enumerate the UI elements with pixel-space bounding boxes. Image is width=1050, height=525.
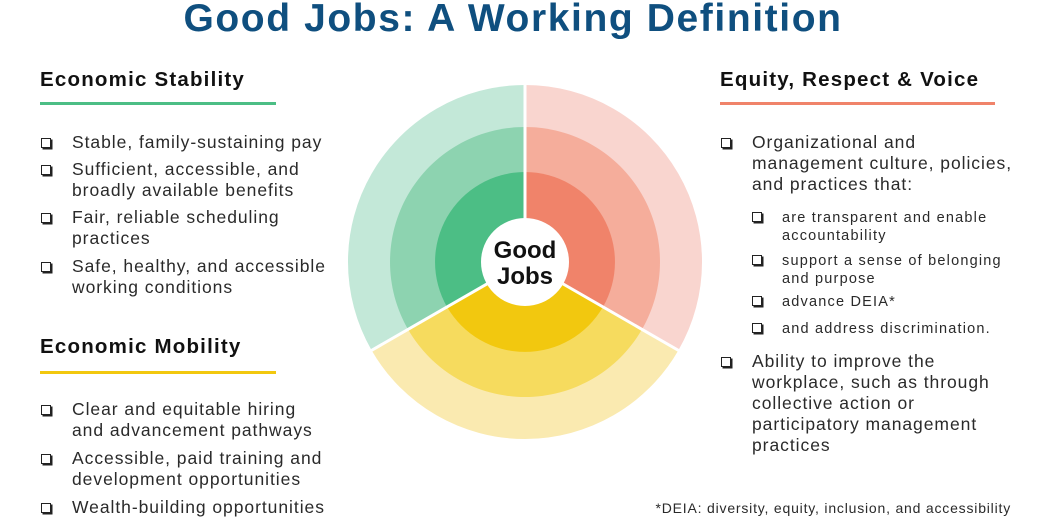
list: equity items: management culture, policies, <box>752 153 1012 173</box>
center label: Jobs <box>497 263 553 290</box>
list: stability items: practices <box>72 228 151 248</box>
list: equity items: are transparent and enable <box>782 210 987 226</box>
list: mobility items: Clear and equitable hiring <box>72 399 296 419</box>
list: stability items: Safe, healthy, and accessible <box>72 256 326 276</box>
list: equity items: collective action or <box>752 393 915 413</box>
list: equity items: and address discrimination. <box>782 321 991 337</box>
footnote: *DEIA: diversity, equity, inclusion, and accessibility <box>656 500 1011 516</box>
list: equity items: support a sense of belonging <box>782 253 1002 269</box>
list: equity items: Organizational and <box>752 132 916 152</box>
list: equity items: and practices that: <box>752 174 913 194</box>
center label: Good <box>494 237 556 264</box>
list: equity items: and purpose <box>782 271 876 287</box>
list: stability items: Stable, family-sustaining pay <box>72 132 322 152</box>
list: equity items <box>721 132 1012 455</box>
list: mobility items: Accessible, paid training and <box>72 448 322 468</box>
wedge: yellow <box>372 262 678 439</box>
list: stability items <box>41 132 326 297</box>
list: stability items: Sufficient, accessible, and <box>72 159 300 179</box>
list: mobility items: Wealth-building opportunities <box>72 497 325 517</box>
underline yellow <box>40 371 276 374</box>
heading: economic stability: Economic Stability <box>40 68 245 91</box>
list: mobility items: development opportunities <box>72 469 301 489</box>
list: stability items: Fair, reliable scheduling <box>72 207 280 227</box>
panel: economic stability <box>40 68 326 297</box>
list: equity items: Ability to improve the <box>752 351 935 371</box>
list: stability items: broadly available benefits <box>72 180 294 200</box>
list: equity items: workplace, such as through <box>752 372 990 392</box>
center label <box>481 218 569 306</box>
list: mobility items <box>41 399 325 517</box>
heading: equity: Equity, Respect & Voice <box>720 68 979 91</box>
panel: equity, respect & voice <box>720 68 1012 455</box>
underline green <box>40 102 276 105</box>
heading: economic mobility: Economic Mobility <box>40 335 242 358</box>
list: equity items: accountability <box>782 228 887 244</box>
underline red <box>720 102 995 105</box>
wedge: green <box>348 85 525 350</box>
panel: economic mobility <box>40 335 325 517</box>
list: mobility items: and advancement pathways <box>72 420 313 440</box>
list: equity items: participatory management <box>752 414 977 434</box>
wedge: red <box>525 85 702 350</box>
list: stability items: working conditions <box>72 277 233 297</box>
list: equity items: practices <box>752 435 831 455</box>
list: equity items: advance DEIA* <box>782 294 896 310</box>
